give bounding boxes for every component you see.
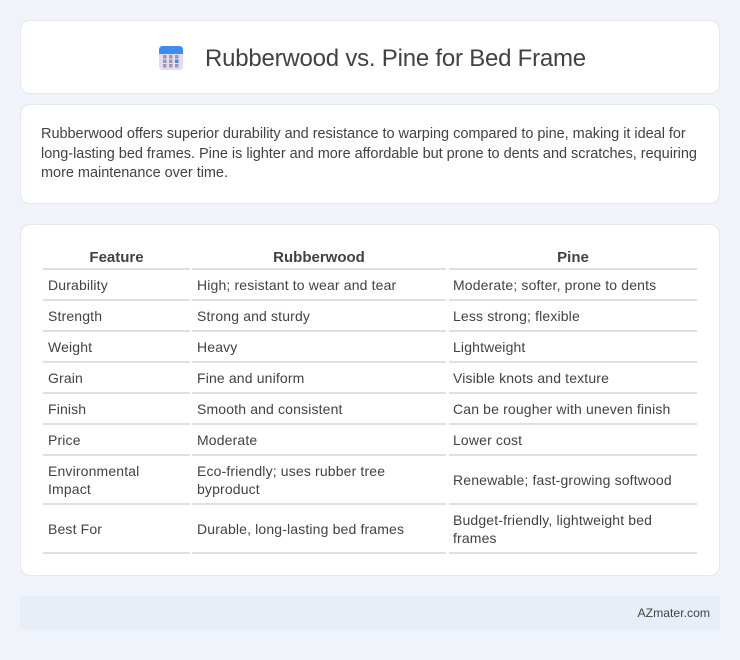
panel: comparison table: Durability	[48, 277, 108, 293]
table header: Rubberwood: Rubberwood	[273, 249, 365, 266]
panel: comparison table: byproduct	[197, 481, 260, 497]
panel: comparison table: Price	[48, 432, 81, 448]
panel: comparison table: Durable, long-lasting bed frames	[197, 521, 404, 537]
panel: comparison table: Grain	[48, 370, 83, 386]
row: Grain	[48, 370, 609, 386]
panel: comparison table: Moderate	[197, 432, 257, 448]
panel: comparison table: Strength	[48, 308, 102, 324]
summary text	[41, 126, 697, 181]
panel: comparison table: Eco-friendly; uses rubber tree	[197, 463, 385, 479]
panel: comparison table: Less strong; flexible	[453, 308, 580, 324]
panel: comparison table: Finish	[48, 401, 86, 417]
panel: comparison table: Best For	[48, 521, 102, 537]
panel: comparison table: Lightweight	[453, 339, 525, 355]
panel: comparison table: High; resistant to wear and tear	[197, 277, 396, 293]
panel: summary	[20, 104, 720, 204]
summary text: long-lasting bed frames. Pine is lighter and more affordable but prone to dents and scratches, requiring	[41, 146, 697, 162]
footer bar	[20, 596, 720, 630]
panel: comparison table: Lower cost	[453, 432, 522, 448]
panel: comparison table: frames	[453, 530, 497, 546]
panel: comparison table: Budget-friendly, lightweight bed	[453, 512, 652, 528]
icon: calendar	[159, 46, 183, 70]
row: Best For	[48, 512, 652, 546]
panel: comparison table: Visible knots and texture	[453, 370, 609, 386]
panel: comparison table: Fine and uniform	[197, 370, 304, 386]
panel: comparison table: Strong and sturdy	[197, 308, 310, 324]
panel: title card	[20, 20, 720, 94]
panel: comparison table: Smooth and consistent	[197, 401, 343, 417]
row: Weight	[48, 339, 526, 355]
row: Durability	[48, 277, 656, 293]
row: Price	[48, 432, 522, 448]
table header: Feature: Feature	[89, 249, 144, 266]
panel: comparison table	[20, 224, 720, 576]
panel: comparison table: Weight	[48, 339, 92, 355]
panel: comparison table: Renewable; fast-growing softwood	[453, 472, 672, 488]
row: Environmental Impact	[48, 463, 672, 497]
summary text: Rubberwood offers superior durability and resistance to warping compared to pine, making it ideal for	[41, 126, 686, 142]
panel: comparison table: Heavy	[197, 339, 237, 355]
table header: Pine: Pine	[557, 249, 589, 266]
row: Strength	[48, 308, 580, 324]
panel: comparison table: Environmental	[48, 463, 139, 479]
footer credit: AZmater.com	[638, 606, 710, 620]
summary text: more maintenance over time.	[41, 165, 228, 181]
panel: comparison table: Impact	[48, 481, 91, 497]
panel: comparison table: Can be rougher with uneven finish	[453, 401, 670, 417]
panel: comparison table: Moderate; softer, prone to dents	[453, 277, 656, 293]
row: Finish	[48, 401, 670, 417]
title: Rubberwood vs. Pine for Bed Frame	[205, 45, 586, 72]
